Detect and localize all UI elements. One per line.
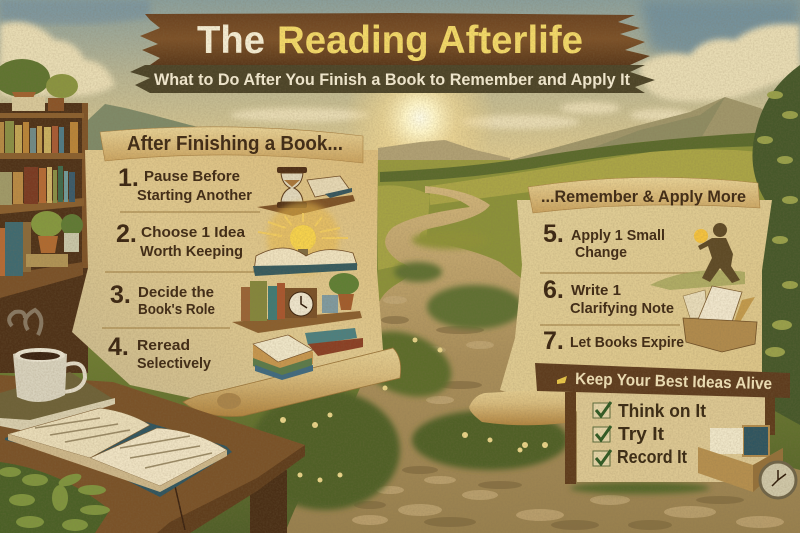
step 3: Book's Role [138,301,215,318]
sign posts [565,392,775,484]
foliage on the right [752,65,800,425]
step 1 [118,164,252,204]
step 2: Choose 1 Idea [141,224,246,241]
icon: coffee cup [9,310,85,402]
panel: after finishing a book [72,127,401,416]
scroll roll [183,348,401,416]
cobblestones [352,296,784,530]
plants on top of shelf [0,59,78,111]
winding path [285,186,800,533]
desk [0,310,305,533]
heading: after finishing: After Finishing a Book... [127,133,343,155]
subtitle banner [130,65,655,93]
icon: open book [5,408,232,497]
subtitle: What to Do After You Finish a Book to Remember and Apply It [154,70,630,89]
step 5: Change [575,244,627,261]
sign heading: Keep Your Best Ideas Alive [575,370,772,393]
sign heading [535,363,790,398]
scroll body [72,150,393,400]
step 7 [543,327,684,355]
distant mountains [88,97,790,185]
heading: after finishing [100,127,363,163]
step 2 [116,220,246,260]
bookshelf [0,59,88,373]
step 1: 1. [118,164,139,192]
step 4: 4. [108,333,129,361]
panel: keep your best ideas alive sign [535,363,796,498]
icon: shelf with books, clock and plant [232,273,362,333]
step 6: Clarifying Note [570,300,674,317]
checklist: Think on It [618,401,706,421]
step 6 [543,276,674,317]
step 3 [110,281,215,318]
scroll roll [469,388,570,425]
step 1: Starting Another [137,187,252,204]
step 4: Selectively [137,355,212,372]
icon: foreground plant [0,462,110,533]
icon: light bulb over open book [253,202,357,276]
checklist: Record It [617,447,687,467]
title: The [197,19,265,62]
book under cup [0,372,115,432]
step 6: 6. [543,276,564,304]
checklist: Try It [618,424,664,444]
checklist [593,401,706,467]
step 3: Decide the [138,284,214,301]
heading: remember and apply: ...Remember & Apply More [541,187,746,206]
shelf books [0,121,78,276]
icon: box of notes [683,286,757,352]
step 7: 7. [543,327,564,355]
panel: remember and apply [469,177,772,425]
step 4 [108,333,212,372]
rolling green hills [0,132,800,533]
step 5 [543,220,665,261]
title banner [140,13,650,65]
step 2: 2. [116,220,137,248]
icon: figure walking with lamp [650,223,745,290]
step 6: Write 1 [571,282,621,299]
step 5: 5. [543,220,564,248]
title: Reading Afterlife [277,19,583,62]
step 4: Reread [137,337,190,354]
sign board [577,392,767,482]
step 5: Apply 1 Small [571,227,665,244]
scroll body [500,200,772,412]
grass patches and flowers [250,231,710,510]
heading: remember and apply [528,177,760,213]
icon: stacks of books [253,328,363,380]
small plants on shelf [26,211,83,267]
icon: hourglass and book [257,167,355,216]
step 1: Pause Before [144,168,240,185]
step 2: Worth Keeping [140,243,243,260]
background sky with clouds [0,0,800,220]
step 7: Let Books Expire [570,334,684,351]
icon: box of cards and pocket watch [698,426,796,498]
step 3: 3. [110,281,131,309]
